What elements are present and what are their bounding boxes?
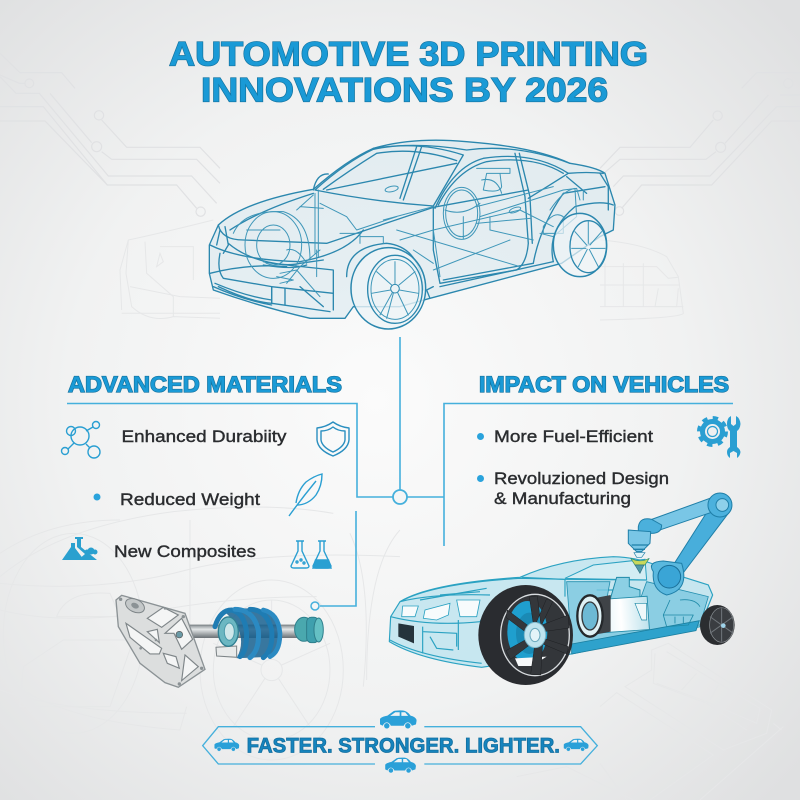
bullet: reduced weight — [94, 494, 100, 500]
rear suspension details — [663, 600, 700, 627]
text: revolutionized design and manufacturing: & Manufacturing — [494, 489, 631, 508]
icon: lab flasks solid — [62, 537, 98, 560]
spring back coils — [223, 608, 279, 658]
icon: shield — [317, 422, 349, 456]
heading: advanced materials: ADVANCED MATERIALS — [68, 372, 342, 397]
spring coils — [215, 609, 280, 658]
printed car with robot arm — [389, 493, 735, 685]
cabin fill interior — [567, 582, 708, 645]
icon: left car — [214, 739, 239, 751]
hood highlights — [402, 600, 480, 620]
icon: right car — [564, 739, 589, 751]
panel: impact on vehicles list — [477, 416, 740, 508]
icon: top car — [380, 710, 417, 729]
text: more fuel-efficient: More Fuel-Efficient — [494, 427, 653, 446]
title: AUTOMOTIVE 3D PRINTING — [169, 36, 648, 74]
front wheel — [478, 585, 573, 685]
text: new composites: New Composites — [114, 542, 256, 561]
electric motor — [577, 595, 649, 637]
seat block — [610, 577, 640, 600]
connector lines — [67, 337, 733, 610]
background ghost car lower left — [0, 507, 400, 760]
text: revolutionized design and manufacturing — [494, 469, 669, 508]
rocker sill — [572, 621, 699, 654]
background circuit pattern left — [0, 53, 220, 216]
icon: molecule — [62, 422, 100, 458]
title — [169, 36, 648, 110]
text: reduced weight: Reduced Weight — [120, 490, 260, 509]
side glass and cabin — [565, 559, 647, 580]
robot arm — [628, 493, 732, 595]
internal chassis lines — [233, 168, 583, 297]
background ghost car right of main car — [600, 240, 683, 320]
background ghost car left of main car — [120, 220, 220, 319]
rear wheel — [700, 605, 735, 645]
grille — [398, 623, 414, 643]
windows and body lines — [210, 145, 613, 312]
front wheel — [351, 248, 426, 329]
rod — [150, 625, 297, 638]
bullet: revolutionized design — [477, 475, 484, 482]
banner slogan: FASTER. STRONGER. LIGHTER. — [247, 734, 560, 757]
rod mid highlight — [224, 623, 234, 640]
heading: impact on vehicles: IMPACT ON VEHICLES — [479, 372, 729, 397]
mount plate — [216, 646, 237, 657]
bullet: fuel efficient — [477, 433, 484, 440]
icon: gear and wrench — [699, 416, 740, 458]
icon: bottom car — [385, 758, 416, 773]
teal end cap — [295, 617, 323, 643]
bumper and details — [390, 577, 647, 663]
3D printed suspension part — [116, 595, 323, 687]
icon: feather — [289, 474, 322, 516]
lattice bracket — [116, 595, 205, 687]
text: enhanced durability: Enhanced Durabiity — [122, 427, 287, 446]
main wireframe car — [209, 140, 615, 329]
rear wheel — [553, 213, 607, 277]
panel: advanced materials list — [62, 422, 349, 568]
background ghost chassis lower right — [517, 643, 783, 800]
banner — [203, 710, 597, 773]
text: revolutionized design and manufacturing: Revoluzioned Design — [494, 469, 669, 488]
title: INNOVATIONS BY 2026 — [201, 72, 608, 110]
background circuit pattern right — [600, 73, 800, 215]
bearing collar — [218, 617, 238, 646]
car body — [389, 557, 713, 667]
icon: lab flasks outline — [291, 541, 331, 568]
banner frame — [203, 727, 597, 764]
car body shell — [209, 140, 615, 318]
